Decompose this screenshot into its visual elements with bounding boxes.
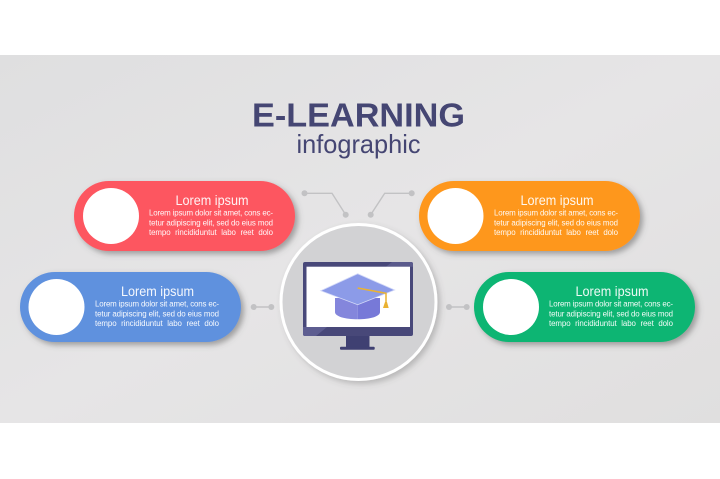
icon placeholder: green circle — [483, 279, 539, 335]
heading: green: Lorem ipsum — [576, 284, 648, 299]
text block: green: tetur adipiscing elit, sed do eius mod — [549, 309, 673, 318]
graduation cap — [321, 274, 395, 319]
title: E-LEARNING — [252, 98, 465, 134]
text block: blue: Lorem ipsum dolor sit amet, cons ec- — [95, 300, 219, 309]
subtitle: infographic — [296, 129, 420, 159]
cap base — [335, 298, 380, 319]
heading: orange: Lorem ipsum — [520, 193, 594, 208]
heading: red: Lorem ipsum — [176, 193, 248, 208]
connector: top right — [368, 190, 415, 218]
icon placeholder: red circle — [83, 188, 139, 244]
text block: green — [549, 300, 674, 328]
text block: red: tempo rincididuntut labo reet dolo — [149, 228, 274, 237]
text block: orange — [494, 209, 619, 237]
heading: blue: Lorem ipsum — [121, 284, 194, 299]
panel: blue — [20, 272, 241, 342]
background panel — [0, 55, 720, 423]
text block: orange: tempo rincididuntut labo reet dolo — [494, 228, 619, 237]
icon placeholder: orange circle — [428, 188, 484, 244]
monitor stand — [340, 336, 375, 350]
text block: blue: tempo rincididuntut labo reet dolo — [95, 319, 220, 328]
monitor screen — [306, 267, 410, 327]
panel: green — [474, 272, 695, 342]
tassel — [358, 288, 389, 308]
text block: green: Lorem ipsum dolor sit amet, cons ec- — [549, 300, 673, 309]
icon: monitor with graduation cap — [303, 262, 413, 350]
text block: red: Lorem ipsum dolor sit amet, cons ec- — [149, 209, 273, 218]
cap board — [321, 274, 395, 305]
connector: left — [251, 304, 274, 310]
connector: top left — [302, 190, 349, 218]
text block: red: tetur adipiscing elit, sed do eius mod — [149, 218, 273, 227]
text block: blue — [95, 300, 220, 328]
text block: green: tempo rincididuntut labo reet dolo — [549, 319, 674, 328]
monitor frame — [303, 262, 413, 336]
text block: red — [149, 209, 274, 237]
central circle — [281, 224, 436, 380]
panel: red — [74, 181, 295, 251]
panel: orange — [419, 181, 640, 251]
text block: blue: tetur adipiscing elit, sed do eius mod — [95, 309, 219, 318]
text block: orange: tetur adipiscing elit, sed do eius mod — [494, 218, 618, 227]
text block: orange: Lorem ipsum dolor sit amet, cons ec- — [494, 209, 618, 218]
connector: right — [446, 304, 470, 310]
icon placeholder: blue circle — [28, 279, 84, 335]
